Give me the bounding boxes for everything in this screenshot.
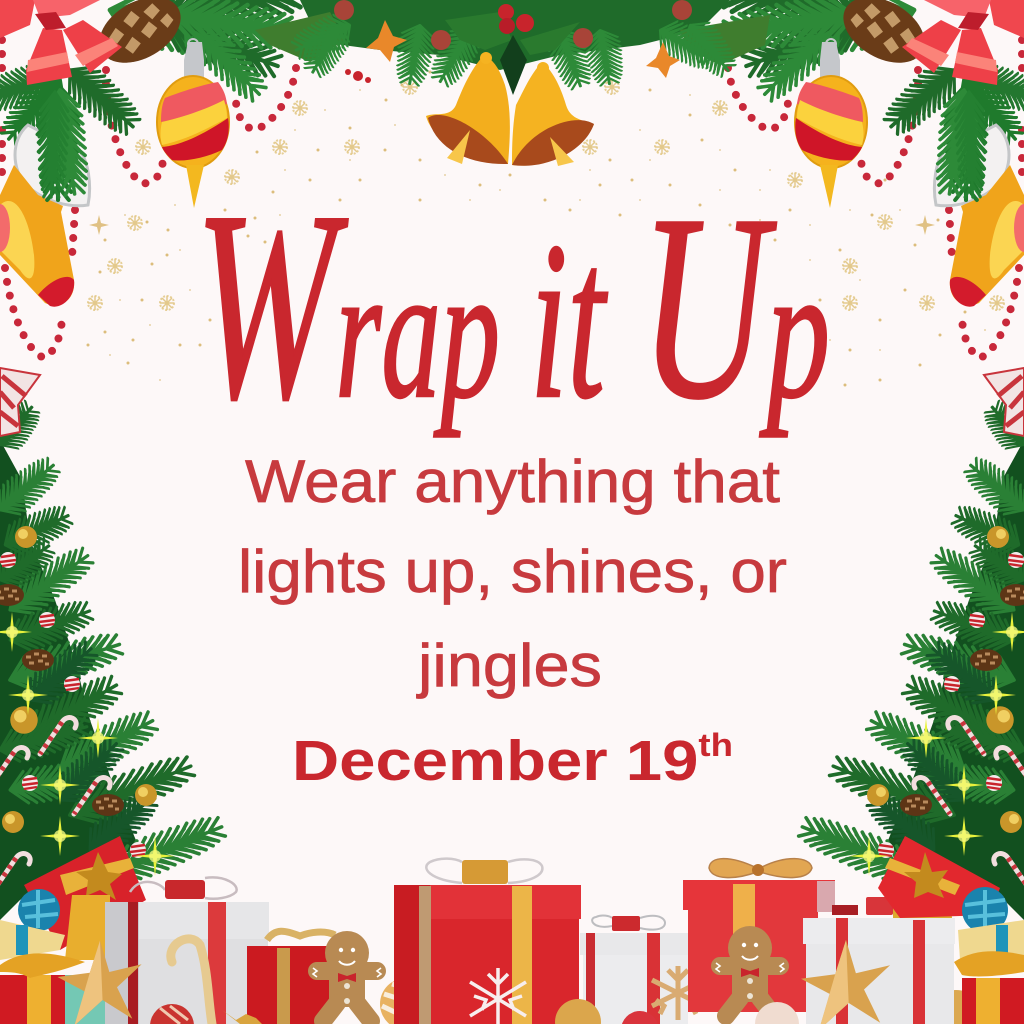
right tree xyxy=(795,368,1024,920)
teal gift xyxy=(62,975,142,1024)
gold snowflake xyxy=(652,966,704,1020)
snowflake xyxy=(470,968,526,1024)
event description xyxy=(238,448,787,699)
title: Wrap xyxy=(195,156,500,455)
right tilted red gift xyxy=(878,836,1000,918)
tilted red gift xyxy=(24,836,146,950)
event date: December 19 xyxy=(292,729,647,793)
candy cane xyxy=(171,939,212,1024)
right top corner decorations xyxy=(712,0,1024,358)
left top corner decorations xyxy=(0,0,312,358)
right gold star xyxy=(801,940,890,1024)
left tree xyxy=(0,368,229,920)
title: Up xyxy=(640,161,830,454)
icon: golden bells xyxy=(426,52,594,166)
gold squiggle xyxy=(222,1010,262,1024)
gold gift xyxy=(65,895,110,960)
cream gift xyxy=(0,920,65,960)
red gift with gold ribbon xyxy=(247,931,335,1024)
title xyxy=(195,156,830,455)
gold confetti field xyxy=(88,72,1004,385)
right front red gift with gold bow xyxy=(954,951,1024,1024)
baubles row xyxy=(555,990,984,1024)
white gift with red ribbon xyxy=(580,915,688,1024)
icon: gingerbread man right xyxy=(716,926,784,1016)
red striped bauble xyxy=(150,1004,194,1024)
event description: Wear anything that xyxy=(245,448,780,515)
event description: jingles xyxy=(416,632,602,699)
gold star xyxy=(58,940,142,1024)
top centre garland xyxy=(255,0,770,95)
tall red gift xyxy=(683,859,835,1012)
gold striped bauble xyxy=(380,978,432,1024)
event description: lights up, shines, or xyxy=(238,538,787,605)
big red gift xyxy=(394,859,581,1024)
right cream gift xyxy=(958,920,1024,960)
right blue bow xyxy=(962,887,1008,933)
left gifts group xyxy=(0,836,432,1024)
grey gift with red ribbon xyxy=(105,877,269,1024)
title: it xyxy=(530,195,608,445)
icon: gingerbread man xyxy=(313,931,381,1021)
white gift with two red ribbons xyxy=(803,895,955,1024)
front red gift with gold bow xyxy=(0,953,85,1024)
event date: th xyxy=(698,727,733,763)
blue bow xyxy=(18,889,60,931)
